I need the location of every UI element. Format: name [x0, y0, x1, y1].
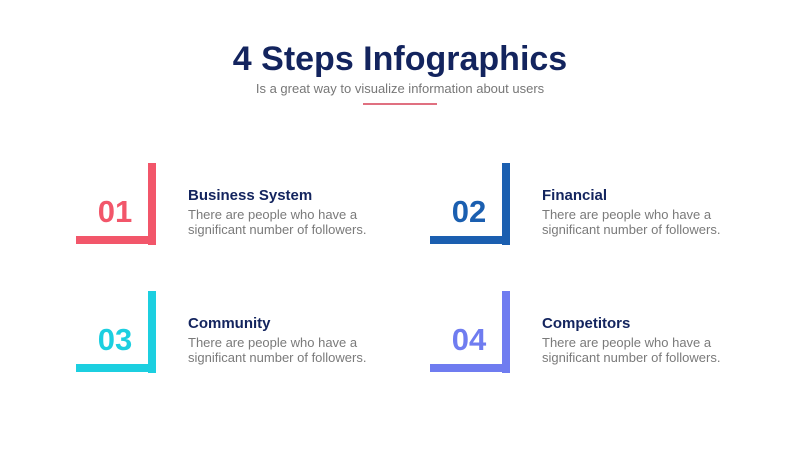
- heading: Community: Community: [188, 315, 270, 332]
- heading: Financial: Financial: [542, 187, 607, 204]
- number 02: 02: [452, 194, 486, 229]
- text: description 1: significant number of followers.: [188, 222, 366, 237]
- text: description 1: There are people who have a: [188, 207, 357, 222]
- underline accent: [363, 103, 437, 105]
- text: description 3: [188, 335, 366, 365]
- panel: step 02: [430, 163, 720, 245]
- subtitle: Is a great way to visualize information about users: [256, 81, 544, 96]
- number 03: 03: [98, 322, 132, 357]
- text: description 1: [188, 207, 366, 237]
- text: description 4: There are people who have a: [542, 335, 711, 350]
- text: description 2: significant number of followers.: [542, 222, 720, 237]
- heading: Business System: Business System: [188, 187, 312, 204]
- title: 4 Steps Infographics: [233, 40, 567, 78]
- text: description 3: significant number of followers.: [188, 350, 366, 365]
- text: description 2: There are people who have a: [542, 207, 711, 222]
- text: description 4: significant number of followers.: [542, 350, 720, 365]
- panel: step 01: [76, 163, 366, 245]
- heading: Competitors: Competitors: [542, 315, 630, 332]
- text: description 4: [542, 335, 720, 365]
- text: description 3: There are people who have a: [188, 335, 357, 350]
- text: description 2: [542, 207, 720, 237]
- number 01: 01: [98, 194, 132, 229]
- number 04: 04: [452, 322, 486, 357]
- panel: step 03: [76, 291, 366, 373]
- panel: step 04: [430, 291, 720, 373]
